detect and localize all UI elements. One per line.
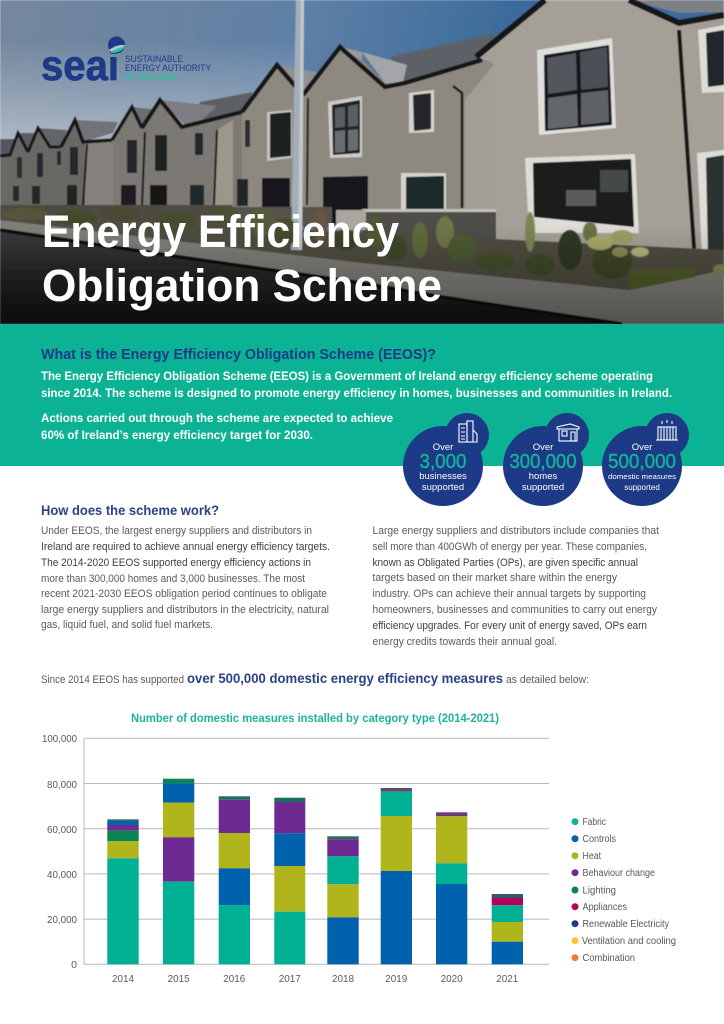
text block: left column: recent 2021-2030 EEOS obligation period continues to obligate xyxy=(41,588,327,600)
text block: left column: Ireland are required to achieve annual energy efficiency targets. xyxy=(41,541,330,553)
stacked bar chart xyxy=(42,733,549,985)
stat bubble: domestic measures: Over xyxy=(632,442,652,453)
text block: right column: Large energy suppliers and distributors include companies that xyxy=(372,525,659,537)
y axis labels: 60,000 xyxy=(47,824,77,836)
stat bubble: businesses: supported xyxy=(422,482,464,493)
stat bubble: domestic measures: domestic measures xyxy=(608,472,676,481)
icon: office buildings xyxy=(459,421,477,442)
chart legend: Ventilation and cooling xyxy=(582,936,676,947)
text block: right column: industry. OPs can achieve their annual targets by supporting xyxy=(372,588,646,600)
stat bubble: businesses: Over xyxy=(433,442,453,453)
intro heading: What is the Energy Efficiency Obligation Scheme (EEOS)? xyxy=(41,347,436,363)
SEAI logo: ENERGY AUTHORITY xyxy=(125,63,211,73)
stat bubble: homes xyxy=(503,413,589,506)
chart title: Number of domestic measures installed by category type (2014-2021) xyxy=(131,711,499,725)
chart legend: Heat xyxy=(582,851,601,862)
stat bubble: businesses: businesses xyxy=(419,471,467,482)
bar: 2014 xyxy=(107,819,139,964)
text block: left column: gas, liquid fuel, and solid fuel markets. xyxy=(41,619,213,631)
y axis labels: 40,000 xyxy=(47,869,77,881)
bar: 2017 xyxy=(274,798,305,964)
text block: right column: targets based on their market share within the energy xyxy=(372,572,618,584)
chart legend: Fabric xyxy=(582,817,606,828)
text block: right column: sell more than 400GWh of energy per year. These companies, xyxy=(372,541,647,553)
text block: left column: Under EEOS, the largest energy suppliers and distributors in xyxy=(41,525,312,537)
text block: left column: large energy suppliers and distributors in the electricity, natural xyxy=(41,604,329,616)
text block: right column: efficiency upgrades. For every unit of energy saved, OPs earn xyxy=(372,620,647,632)
icon: radiator xyxy=(656,420,678,440)
chart legend: Lighting xyxy=(582,886,616,896)
intro text: since 2014. The scheme is designed to promote energy efficiency in homes, businesses and communities in Ireland. xyxy=(41,386,672,400)
intro text: The Energy Efficiency Obligation Scheme (EEOS) is a Government of Ireland energy efficiency scheme operating xyxy=(41,369,653,383)
title: Obligation Scheme xyxy=(42,260,442,311)
text block: right column xyxy=(372,525,659,648)
bar: 2016 xyxy=(219,796,250,964)
y axis labels: 0 xyxy=(71,959,77,971)
SEAI logo xyxy=(41,36,211,90)
summary sentence: Since 2014 EEOS has supported xyxy=(41,674,184,686)
stat bubble: domestic measures xyxy=(602,413,689,506)
x axis labels: 2021 xyxy=(496,973,518,985)
y axis labels: 20,000 xyxy=(47,914,77,926)
x axis labels: 2017 xyxy=(279,973,301,985)
panel: teal intro band xyxy=(0,324,724,466)
summary sentence: as detailed below: xyxy=(506,674,589,686)
intro text xyxy=(41,369,672,442)
stat bubble: businesses xyxy=(403,413,489,506)
stat bubble: homes: supported xyxy=(522,482,564,493)
bar: 2015 xyxy=(163,779,194,964)
SEAI logo: seai xyxy=(41,42,119,90)
stat bubble: businesses: 3,000 xyxy=(420,451,466,473)
chart legend: Combination xyxy=(582,953,635,964)
stat bubble: homes: homes xyxy=(529,471,558,482)
y axis labels: 100,000 xyxy=(42,733,77,745)
text block: left column: The 2014-2020 EEOS supported energy efficiency actions in xyxy=(41,557,311,569)
stat bubble: domestic measures: supported xyxy=(624,483,660,492)
text block: right column: homeowners, businesses and communities to carry out energy xyxy=(372,604,658,616)
chart legend: Controls xyxy=(582,834,616,845)
bar: 2018 xyxy=(327,836,359,964)
stat bubble: homes: Over xyxy=(533,442,553,453)
SEAI logo: SUSTAINABLE xyxy=(125,54,183,64)
hero photo: row of houses xyxy=(0,0,724,324)
x axis labels: 2015 xyxy=(168,973,190,985)
x axis labels: 2018 xyxy=(332,973,354,985)
stat bubble: homes: 300,000 xyxy=(510,451,576,473)
x axis labels: 2016 xyxy=(223,973,245,985)
x axis labels: 2020 xyxy=(441,973,463,985)
chart legend: Appliances xyxy=(582,902,627,913)
x axis labels xyxy=(112,973,518,985)
text block: left column xyxy=(41,525,330,631)
stat bubble: domestic measures: 500,000 xyxy=(608,451,676,473)
text block: left column: more than 300,000 homes and 3,000 businesses. The most xyxy=(41,573,305,585)
SEAI logo: OF IRELAND xyxy=(125,72,176,82)
summary sentence xyxy=(41,670,589,686)
x axis labels: 2019 xyxy=(385,973,407,985)
y axis labels: 80,000 xyxy=(47,779,77,791)
title xyxy=(42,206,442,311)
x axis labels: 2014 xyxy=(112,973,134,985)
chart legend: Behaviour change xyxy=(582,868,655,879)
icon: house xyxy=(557,424,579,441)
chart legend: Renewable Electricity xyxy=(582,919,669,930)
title: Energy Efficiency xyxy=(42,206,399,257)
bar: 2020 xyxy=(436,812,467,964)
y axis labels xyxy=(42,733,77,971)
heading: how does the scheme work: How does the scheme work? xyxy=(41,503,219,518)
bar: 2019 xyxy=(381,788,412,964)
text block: right column: energy credits towards their annual goal. xyxy=(372,636,557,648)
text block: right column: known as Obligated Parties (OPs), are given specific annual xyxy=(372,557,638,569)
summary sentence: over 500,000 domestic energy efficiency measures xyxy=(187,670,503,686)
bar: 2021 xyxy=(492,894,523,964)
chart legend xyxy=(572,817,676,964)
intro text: Actions carried out through the scheme are expected to achieve xyxy=(41,411,393,425)
intro text: 60% of Ireland’s energy efficiency target for 2030. xyxy=(41,428,313,442)
